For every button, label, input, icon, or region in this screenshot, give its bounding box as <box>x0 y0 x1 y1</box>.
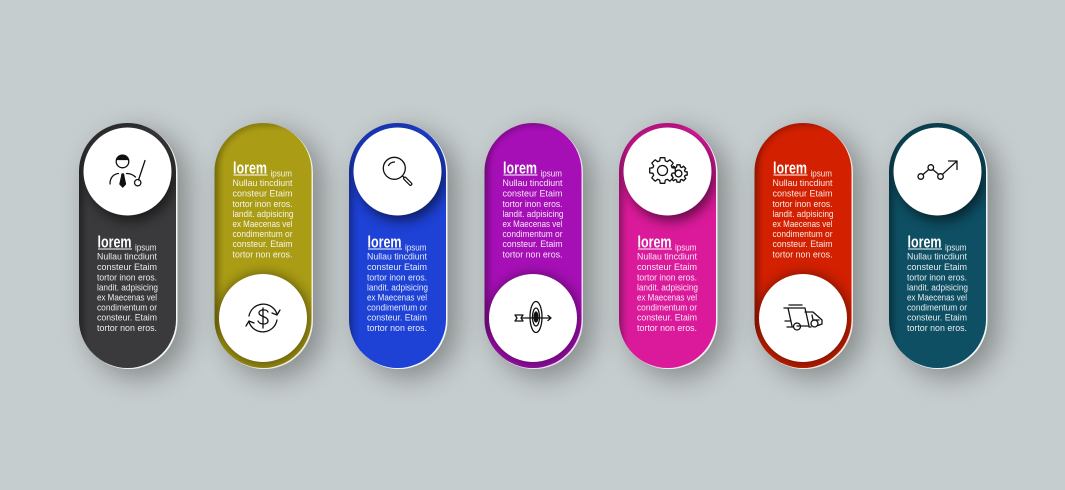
panel: step 4 purple <box>484 123 604 383</box>
text block: tortor non eros. <box>637 323 697 333</box>
text block: landit. adpisicing <box>637 282 698 292</box>
text block: lorem <box>503 158 537 178</box>
panel: step 6 red <box>754 123 874 383</box>
text block: ex Maecenas vel <box>232 219 293 229</box>
text block: consteur. Etaim <box>97 312 157 322</box>
text block: tortor non eros. <box>502 250 562 260</box>
text block <box>772 158 834 260</box>
text block: condimentum or <box>772 229 833 239</box>
text block: landit. adpisicing <box>772 209 834 219</box>
text block: ex Maecenas vel <box>502 219 563 229</box>
text block: consteur. Etaim <box>232 239 292 249</box>
text block <box>97 232 158 333</box>
text block: consteur. Etaim <box>772 239 832 249</box>
text block: landit. adpisicing <box>907 282 968 292</box>
panel: step 7 teal <box>889 123 1009 383</box>
text block: lorem <box>908 232 942 252</box>
panel: step 1 dark <box>79 123 199 383</box>
text block: tortor inon eros. <box>907 272 967 282</box>
text block: consteur. Etaim <box>637 312 697 322</box>
text block: ipsum <box>135 242 156 252</box>
text block: condimentum or <box>637 302 697 312</box>
text block: ex Maecenas vel <box>367 292 427 302</box>
text block: consteur Etaim <box>97 262 157 272</box>
text block: landit. adpisicing <box>97 282 158 292</box>
text block <box>637 232 698 333</box>
text block: Nullau tincdiunt <box>367 252 428 262</box>
text block <box>367 232 428 333</box>
text block <box>907 232 968 333</box>
text block: tortor inon eros. <box>232 199 292 209</box>
text block: Nullau tincdiunt <box>772 178 833 188</box>
text block: consteur Etaim <box>367 262 427 272</box>
text block: tortor inon eros. <box>637 272 697 282</box>
text block: ipsum <box>810 168 832 178</box>
text block: landit. adpisicing <box>502 209 564 219</box>
panel: step 3 blue <box>349 123 469 383</box>
text block: tortor non eros. <box>907 323 967 333</box>
panel: step 5 pink <box>619 123 739 383</box>
icon circle: dollar exchange <box>219 274 307 362</box>
icon circle: rising line chart <box>894 128 982 216</box>
text block: condimentum or <box>907 302 967 312</box>
icon circle: magnifier <box>354 128 442 216</box>
text block: ex Maecenas vel <box>772 219 833 229</box>
text block: consteur Etaim <box>637 262 697 272</box>
text block: consteur. Etaim <box>367 312 427 322</box>
text block: tortor non eros. <box>97 323 157 333</box>
text block: Nullau tincdiunt <box>502 178 563 188</box>
text block: lorem <box>638 232 672 252</box>
text block: ipsum <box>270 168 292 178</box>
text block <box>502 158 564 260</box>
text block: ex Maecenas vel <box>97 292 157 302</box>
icon circle: delivery truck <box>759 274 847 362</box>
text block: ipsum <box>540 168 562 178</box>
text block: consteur Etaim <box>772 188 832 198</box>
icon circle: gears <box>624 128 712 216</box>
text block: consteur Etaim <box>907 262 967 272</box>
text block: ipsum <box>405 242 426 252</box>
text block: consteur Etaim <box>232 188 292 198</box>
text block <box>232 158 294 260</box>
text block: consteur. Etaim <box>502 239 562 249</box>
text block: landit. adpisicing <box>232 209 294 219</box>
text block: condimentum or <box>367 302 427 312</box>
text block: ex Maecenas vel <box>637 292 697 302</box>
text block: ipsum <box>945 242 966 252</box>
text block: tortor inon eros. <box>367 272 427 282</box>
text block: lorem <box>233 158 267 178</box>
text block: Nullau tincdiunt <box>907 252 968 262</box>
text block: ex Maecenas vel <box>907 292 967 302</box>
text block: condimentum or <box>97 302 157 312</box>
text block: tortor non eros. <box>232 250 292 260</box>
text block: tortor non eros. <box>772 250 832 260</box>
text block: Nullau tincdiunt <box>97 252 158 262</box>
text block: ipsum <box>675 242 696 252</box>
icon circle: presenter <box>84 128 172 216</box>
text block: tortor non eros. <box>367 323 427 333</box>
text block: lorem <box>773 158 807 178</box>
text block: lorem <box>98 232 132 252</box>
text block: tortor inon eros. <box>97 272 157 282</box>
icon circle: target and arrow <box>489 274 577 362</box>
text block: condimentum or <box>232 229 293 239</box>
text block: landit. adpisicing <box>367 282 428 292</box>
text block: Nullau tincdiunt <box>637 252 698 262</box>
text block: Nullau tincdiunt <box>232 178 293 188</box>
text block: consteur. Etaim <box>907 312 967 322</box>
text block: tortor inon eros. <box>772 199 832 209</box>
text block: consteur Etaim <box>502 188 562 198</box>
text block: lorem <box>368 232 402 252</box>
text block: tortor inon eros. <box>502 199 562 209</box>
panel: step 2 olive <box>214 123 334 383</box>
text block: condimentum or <box>502 229 563 239</box>
